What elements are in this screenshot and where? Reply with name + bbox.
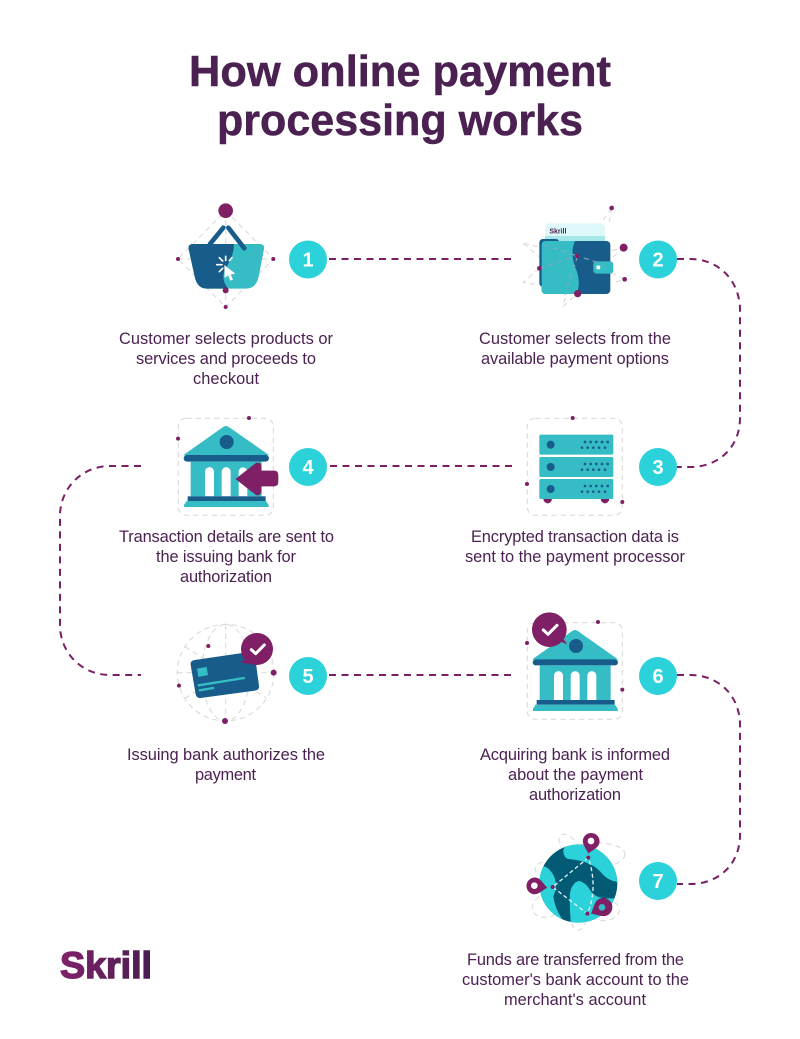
title — [189, 47, 611, 145]
icon: shopping basket — [176, 203, 275, 309]
icon: server rack — [525, 416, 624, 515]
caption: step 7 — [462, 951, 689, 1009]
badge: number 6 — [639, 657, 677, 695]
caption: step 4: the issuing bank for — [156, 548, 297, 566]
caption: step 2: available payment options — [481, 350, 669, 368]
caption: step 7: Funds are transferred from the — [467, 951, 684, 969]
badge: number 4: 4 — [302, 457, 314, 479]
badge: number 2: 2 — [652, 250, 664, 272]
caption: step 2: Customer selects from the — [479, 330, 671, 348]
badge: number 6: 6 — [652, 666, 664, 688]
badge: number 3 — [639, 448, 677, 486]
logo: Skrill: Skrill — [60, 945, 152, 986]
connector: steps 2 to 3 — [677, 259, 740, 467]
caption: step 4: authorization — [180, 568, 272, 586]
connector: steps 5 to 6 — [329, 674, 512, 676]
connector: steps 6 to 7 — [677, 675, 740, 884]
badge: number 7 — [639, 862, 677, 900]
caption: step 6: authorization — [529, 786, 621, 804]
panel: step 6 — [480, 612, 677, 804]
badge: number 5 — [289, 657, 327, 695]
panel: step 4 — [119, 416, 334, 586]
panel: step 2 — [479, 206, 677, 368]
caption: step 1: Customer selects products or — [119, 330, 334, 348]
caption: step 1 — [119, 330, 334, 388]
caption: step 5: payment — [195, 766, 256, 784]
caption: step 6: Acquiring bank is informed — [480, 746, 670, 764]
connector: steps 3 to 4 — [329, 465, 512, 467]
caption: step 6: about the payment — [508, 766, 643, 784]
caption: step 7: customer's bank account to the — [462, 971, 689, 989]
connector: steps 4 to 5 — [60, 466, 141, 675]
icon: wallet: Skrill — [549, 228, 566, 235]
caption: step 4 — [119, 528, 334, 586]
icon: bank with check bubble — [525, 612, 624, 719]
icon: bank with incoming arrow — [176, 416, 278, 515]
panel: step 1 — [119, 203, 334, 388]
caption: step 1: checkout — [193, 370, 259, 388]
title: processing works — [217, 96, 583, 145]
panel: step 7 — [462, 830, 689, 1009]
connector: steps 1 to 2 — [329, 258, 512, 260]
caption: step 3 — [465, 528, 686, 566]
caption: step 1: services and proceeds to — [136, 350, 316, 368]
badge: number 3: 3 — [652, 457, 664, 479]
caption: step 3: sent to the payment processor — [465, 548, 686, 566]
badge: number 2 — [639, 240, 677, 278]
caption: step 5: Issuing bank authorizes the — [127, 746, 325, 764]
badge: number 4 — [289, 448, 327, 486]
badge: number 1: 1 — [302, 250, 314, 272]
badge: number 1 — [289, 240, 327, 278]
badge: number 7: 7 — [652, 871, 664, 893]
caption: step 6 — [480, 746, 670, 804]
caption: step 3: Encrypted transaction data is — [471, 528, 679, 546]
caption: step 7: merchant's account — [504, 991, 646, 1009]
caption: step 2 — [479, 330, 671, 368]
icon: globe with location pins — [525, 830, 626, 930]
caption: step 5 — [127, 746, 325, 784]
caption: step 4: Transaction details are sent to — [119, 528, 334, 546]
icon: wallet — [523, 206, 628, 307]
infographic canvas — [59, 54, 741, 1005]
title: How online payment — [189, 47, 611, 96]
badge: number 5: 5 — [302, 666, 314, 688]
icon: credit card with check bubble — [177, 624, 277, 724]
panel: step 3 — [465, 416, 686, 566]
panel: step 5 — [127, 624, 327, 784]
